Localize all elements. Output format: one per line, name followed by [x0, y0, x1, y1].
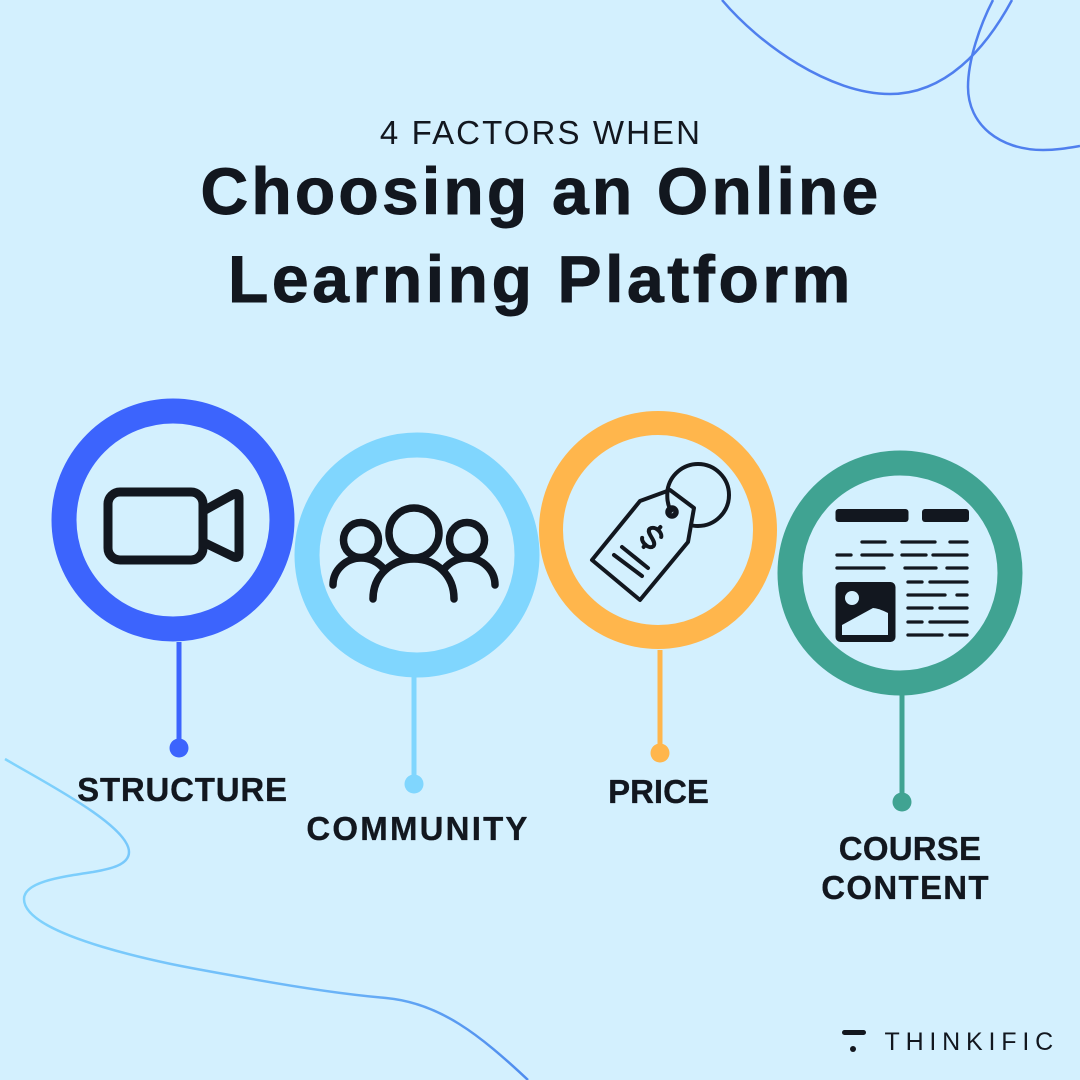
graphic: price — [539, 411, 777, 762]
label: price: PRICE — [608, 773, 709, 810]
icon: video camera — [108, 492, 239, 560]
connector: course content — [892, 695, 912, 812]
connector: structure — [170, 642, 188, 758]
ring: price — [551, 423, 765, 637]
graphic: community — [294, 432, 540, 794]
subtitle: 4 FACTORS WHEN — [380, 114, 702, 151]
graphic: structure — [52, 398, 294, 758]
label: structure: STRUCTURE — [77, 771, 288, 808]
logo wordmark: THINKIFIC — [884, 1028, 1059, 1056]
graphic: course content — [778, 450, 1022, 812]
ring: course content — [790, 463, 1010, 683]
logo: Thinkific — [842, 1028, 1059, 1056]
label: course line 1: COURSE — [839, 830, 981, 867]
decorative curve: top right — [721, 0, 1080, 152]
ring: community — [307, 445, 527, 665]
icon: article layout — [836, 509, 969, 642]
label: content line 2: CONTENT — [821, 869, 990, 906]
icon: price tag — [592, 464, 729, 600]
ring: structure — [64, 411, 282, 629]
logo mark — [842, 1030, 866, 1052]
icon: people group — [333, 508, 495, 599]
decorative curve: bottom left — [4, 758, 529, 1080]
connector: price — [650, 650, 670, 762]
connector: community — [404, 676, 424, 794]
label: community: COMMUNITY — [306, 810, 530, 847]
title line 1: Choosing an Online — [201, 154, 881, 228]
title line 2: Learning Platform — [228, 242, 854, 316]
